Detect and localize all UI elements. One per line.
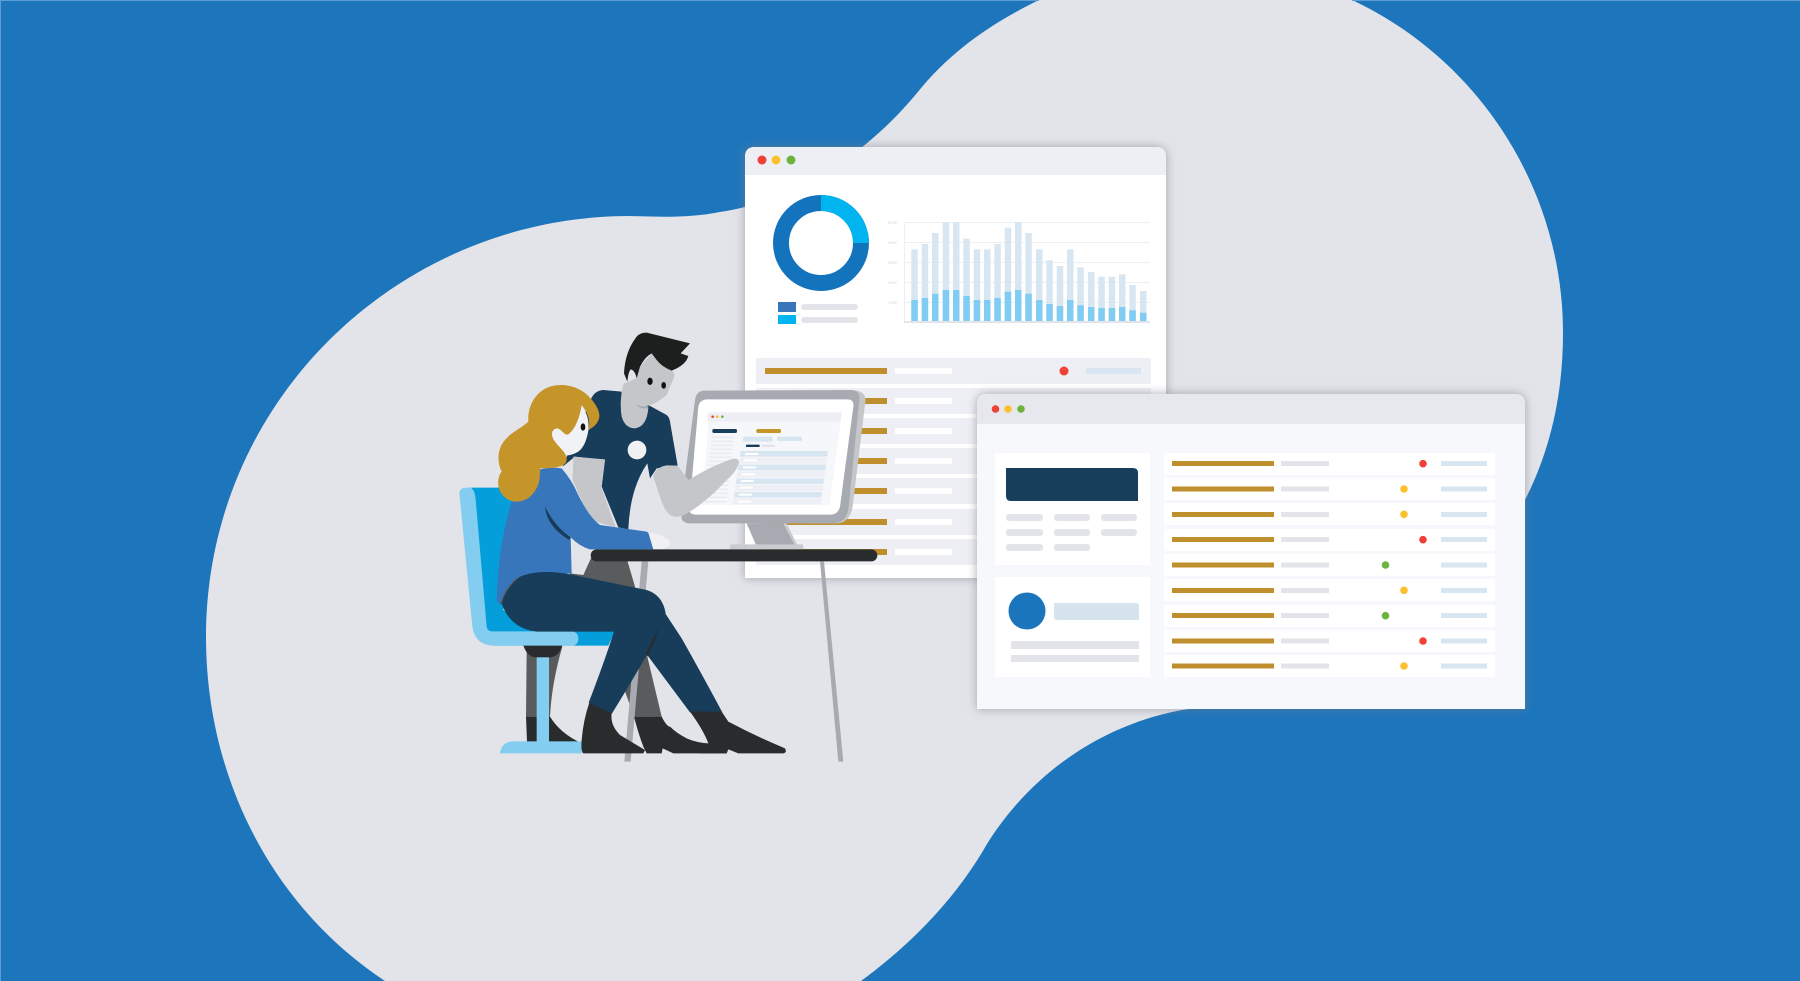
bar chart bbox=[888, 220, 1150, 323]
woman hand bbox=[648, 533, 671, 549]
woman back leg bbox=[646, 614, 722, 712]
people at desk illustration bbox=[459, 333, 877, 762]
man torso and head bbox=[563, 333, 690, 529]
bar chart: 200K bbox=[888, 280, 898, 285]
bar chart: 500K bbox=[888, 220, 898, 225]
window title bar bbox=[745, 147, 1166, 175]
window frame bbox=[745, 147, 1166, 578]
window frame bbox=[977, 394, 1525, 709]
chair bbox=[459, 488, 615, 753]
table left leg bbox=[624, 561, 648, 762]
woman shoes bbox=[581, 703, 786, 753]
monitor screen content bbox=[702, 412, 842, 505]
panel: front status window bbox=[977, 394, 1525, 709]
summary card bbox=[995, 453, 1150, 565]
woman bbox=[497, 385, 786, 753]
table right leg bbox=[820, 561, 843, 762]
hip shadow bbox=[499, 577, 522, 605]
window title bar bbox=[977, 394, 1525, 424]
woman eye bbox=[581, 423, 585, 431]
window controls bbox=[758, 156, 796, 164]
woman front leg bbox=[502, 572, 666, 714]
woman face bbox=[552, 406, 589, 455]
window controls bbox=[992, 405, 1025, 413]
status table rows bbox=[1164, 453, 1495, 677]
grey blob shape bbox=[206, 0, 1563, 981]
donut chart bbox=[781, 203, 861, 283]
bar chart: 400K bbox=[888, 240, 898, 245]
woman hair bbox=[498, 385, 599, 502]
leg shadow bbox=[646, 625, 660, 657]
table rows bbox=[756, 358, 1151, 565]
man legs bbox=[569, 540, 727, 753]
profile card bbox=[995, 577, 1150, 677]
sleeve crease bbox=[545, 507, 571, 540]
table top bbox=[591, 549, 877, 561]
monitor bbox=[682, 390, 865, 549]
man pointing arm bbox=[653, 459, 739, 517]
bar chart: 100K bbox=[888, 300, 898, 305]
panel: back dashboard window bbox=[745, 147, 1166, 578]
woman torso bbox=[497, 468, 654, 605]
donut legend bbox=[778, 302, 858, 324]
bar chart: 300K bbox=[888, 260, 898, 265]
